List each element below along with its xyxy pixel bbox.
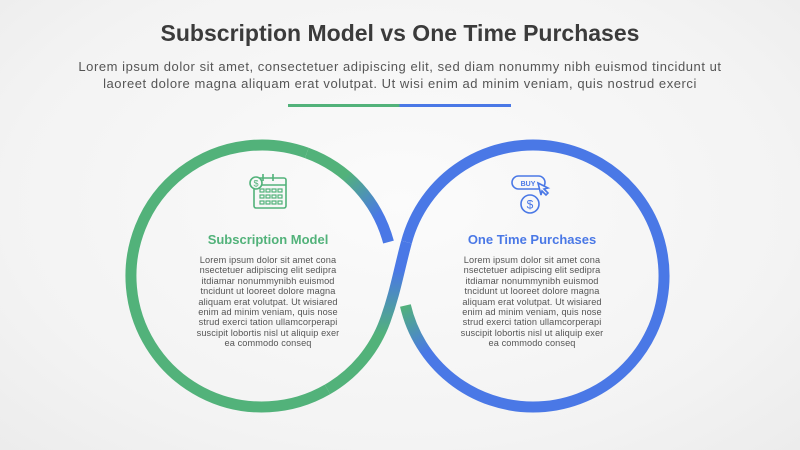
text block: subscription: nsectetuer adipiscing elit sedipra [200, 265, 336, 275]
text block: subscription: strud exerci tation ullamcorperapi [199, 317, 337, 327]
text block: subscription: enim ad minim veniam, quis nose [198, 307, 338, 317]
circle: one time purchases [405, 145, 664, 407]
circle: subscription [131, 145, 407, 407]
icon: buy button with dollar [511, 175, 550, 214]
title: Subscription Model vs One Time Purchases [161, 20, 639, 46]
text block: one time purchases: strud exerci tation ullamcorperapi [463, 317, 601, 327]
heading: one time purchases: One Time Purchases [468, 232, 596, 247]
text block: one time purchases: nsectetuer adipiscing elit sedipra [464, 265, 600, 275]
icon: buy button with dollar: BUY [521, 181, 536, 188]
heading: subscription model: Subscription Model [208, 232, 328, 247]
text block: one time purchases: enim ad minim veniam, quis nose [462, 307, 602, 317]
text block: subscription: Lorem ipsum dolor sit amet cona [200, 255, 336, 265]
icon: calendar with dollar: $ [253, 178, 259, 188]
text block: one time purchases [460, 255, 604, 348]
subtitle text: Lorem ipsum dolor sit amet, consectetuer adipiscing elit, sed diam nonummy nibh euismod tincidunt ut [78, 59, 722, 74]
text block: subscription: suscipit lobortis nisl ut aliquip exer [197, 328, 339, 338]
text block: one time purchases: ea commodo conseq [488, 338, 576, 348]
text block: subscription [196, 255, 340, 348]
text block: one time purchases: itdiamar nonummynibh euismod [465, 276, 599, 286]
title underline [288, 104, 511, 107]
text block: subscription: aliquam erat volutpat. Ut wisiared [198, 297, 338, 307]
icon: calendar with dollar [249, 174, 287, 209]
subtitle text: laoreet dolore magna aliquam erat volutpat. Ut wisi enim ad minim veniam, quis nostrud exerci [103, 76, 697, 91]
text block: one time purchases: tncidunt ut looreet dolore magna [464, 286, 599, 296]
text block: subscription: tncidunt ut looreet dolore magna [200, 286, 335, 296]
text block: one time purchases: Lorem ipsum dolor sit amet cona [464, 255, 600, 265]
text block: subscription: ea commodo conseq [224, 338, 312, 348]
text block: subscription: itdiamar nonummynibh euismod [201, 276, 335, 286]
text block: one time purchases: suscipit lobortis nisl ut aliquip exer [461, 328, 603, 338]
text block: one time purchases: aliquam erat volutpat. Ut wisiared [462, 297, 602, 307]
icon: buy button with dollar: $ [527, 198, 534, 212]
subtitle text [78, 59, 722, 91]
